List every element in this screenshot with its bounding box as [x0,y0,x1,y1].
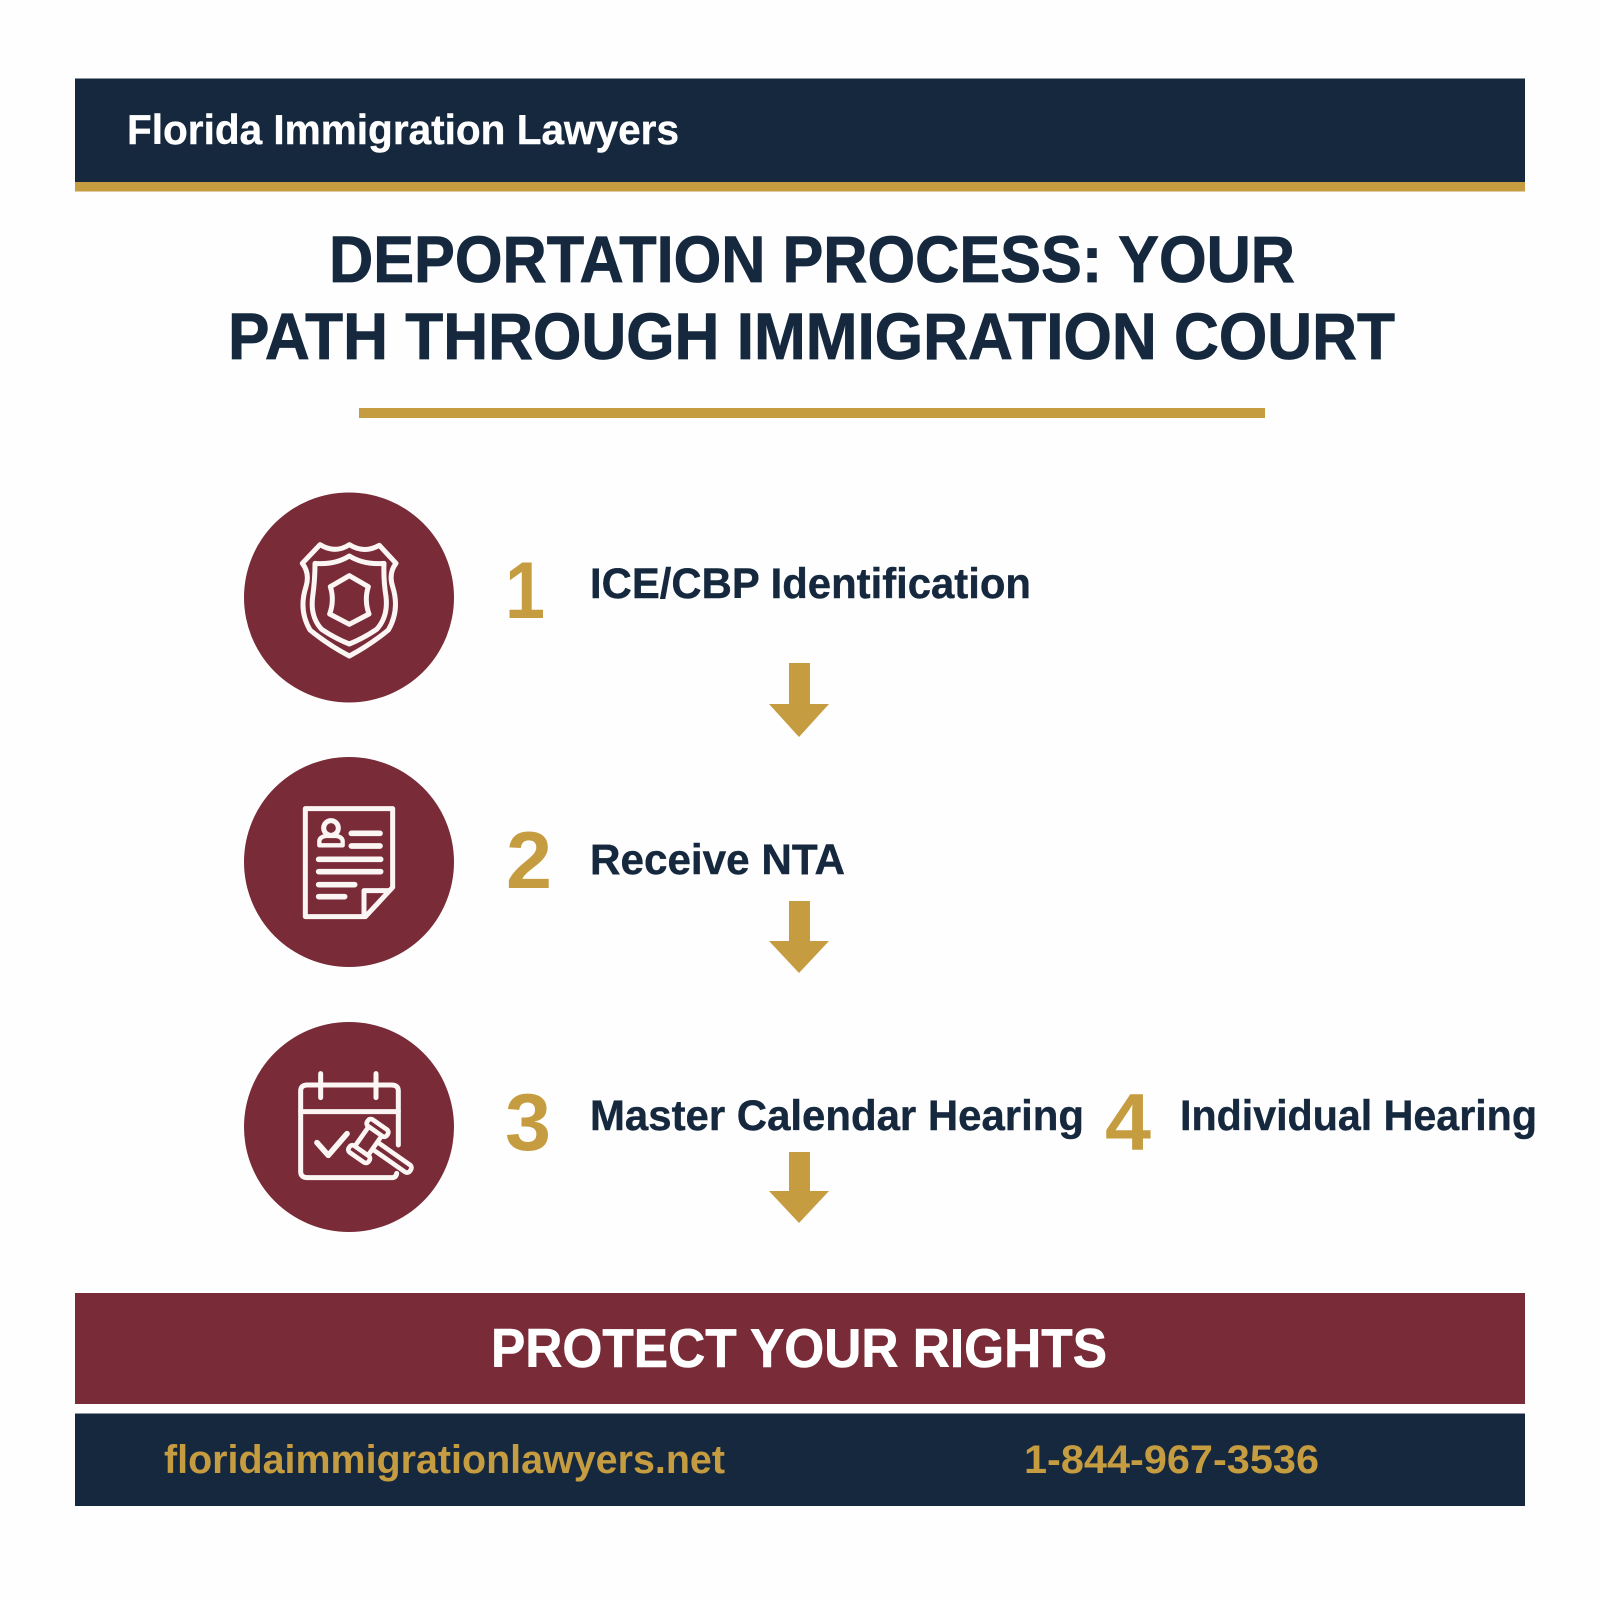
step 4 label: Individual Hearing [1180,1092,1537,1140]
banner: protect your rights: PROTECT YOUR RIGHTS [491,1317,1107,1379]
step 2 icon: document [244,757,454,967]
arrow 1 [769,663,829,737]
step 1 icon: police shield [244,492,454,702]
banner: protect your rights [75,1293,1525,1404]
website: floridaimmigrationlawyers.net [164,1438,725,1482]
step 1 number: 1 [505,546,545,636]
step 1 label: ICE/CBP Identification [590,560,1031,608]
arrow 2 [769,901,829,973]
header band [75,78,1525,192]
arrow 3 [769,1152,829,1223]
phone: 1-844-967-3536 [1024,1438,1319,1482]
title: PATH THROUGH IMMIGRATION COURT [228,299,1395,373]
step 4 number: 4 [1105,1078,1151,1168]
title: DEPORTATION PROCESS: YOUR [329,222,1295,296]
step 3 label: Master Calendar Hearing [590,1092,1084,1140]
title underline [359,408,1265,418]
step 3 number: 3 [505,1078,551,1168]
footer contact band [75,1414,1525,1506]
step 2 number: 2 [506,816,552,906]
step 3 icon: calendar and gavel [244,1022,454,1232]
step 2 label: Receive NTA [590,836,845,884]
firm name: Florida Immigration Lawyers [127,106,679,153]
title [228,222,1395,373]
